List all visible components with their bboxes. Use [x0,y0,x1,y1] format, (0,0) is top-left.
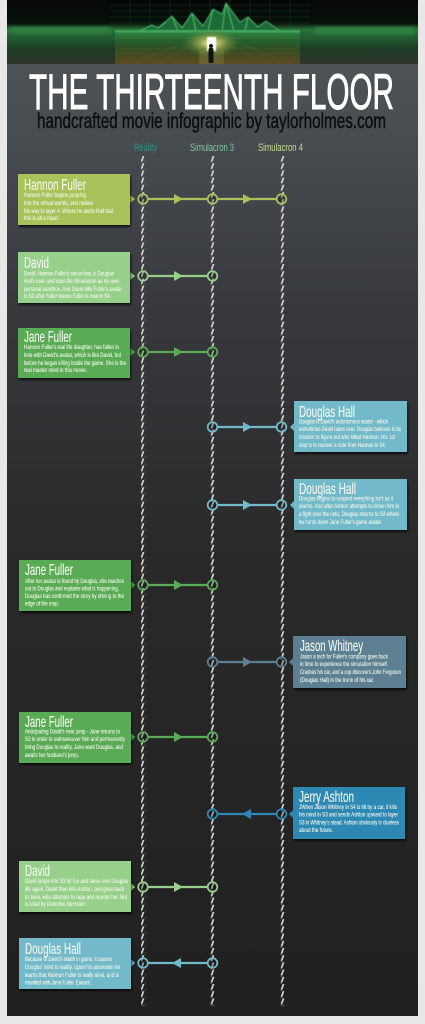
arrow: Douglas Hall Simulacron 3 to Simulacron 4 [208,422,286,432]
card: Jane Fuller [18,328,135,378]
card: Hannon Fuller: into the virtual worlds, and makes [24,200,93,207]
column heading: Simulacron 3: Simulacron 3 [190,142,234,154]
card: Jane Fuller returns: S3 in order to outmaneuver him and permanently [25,736,126,743]
arrow: Jane Fuller Reality to Simulacron 3 [138,347,217,357]
arrow: Jerry Ashton Simulacron 4 to Simulacron 3 [208,809,286,819]
arrow: Douglas Hall Simulacron 3 to Reality [138,958,217,968]
card: Jason Whitney: Jason Whitney [300,638,363,655]
card: David jumps [19,861,135,912]
arrow: Jane Fuller returns [138,732,217,742]
card: Jason Whitney: in time to experience the simulation himself. [300,661,388,668]
card: David jumps: life again. David then kills Ashton, and goes back [25,886,125,893]
card: Hannon Fuller: his way to layer 4. Where he alerts Hall that [24,208,113,215]
card: Jason Whitney: (Douglas Hall) in the trunk of his car. [300,677,374,684]
card: Jane Fuller returns: awaits her husband's jump. [25,752,79,759]
card: David: David [24,255,49,272]
card: Jane Fuller explains: Douglas has confirmed the story by driving to the [25,593,124,600]
arrow: Jason Whitney [208,657,286,667]
card: Douglas Hall ending [19,938,135,989]
card: Hannon Fuller: this is all a fraud. [24,215,59,222]
card: Jane Fuller explains: Jane Fuller [25,562,73,579]
card: Jane Fuller explains: edge of the map. [25,600,59,608]
card: David: in S3 after Fuller leaves Fuller is now in S4. [24,293,111,300]
card: Jane Fuller explains [19,560,135,611]
column heading: Reality: Reality [134,142,157,154]
arrow: David jumps [138,882,217,892]
card: Jerry Ashton: Jerry Ashton [299,789,354,806]
card: Jane Fuller: Hannon Fuller's real life daughter, has fallen in [24,344,119,351]
card: Douglas Hall ending: Because of David's death in game, it causes [25,956,112,963]
card: David: Hall's user, and uses the Simulacron as his own [24,278,119,285]
card: Jane Fuller: Jane Fuller [24,329,72,346]
card: Jerry Ashton: about the future. [299,827,333,834]
arrow: David Reality to Simulacron 3 [138,271,217,281]
arrow: Hannon Fuller Reality to Simulacron 4 [138,194,286,204]
card: Jane Fuller returns [19,712,135,763]
card: Jane Fuller returns: Anticipating David's next jump - Jane returns to [25,728,120,736]
card: Jerry Ashton [289,787,405,839]
card: Jane Fuller explains: After her avatar is found by Douglas, she reaches [25,578,124,585]
column heading: Simulacron 4: Simulacron 4 [258,142,303,154]
timeline: Reality dashed line [141,156,146,1006]
card: Douglas Hall ending: Douglas' mind to reality. Upon his ascension he [25,964,120,971]
card: Douglas Hall autonomous avatar [290,401,407,452]
card: David: David, Hannon Fuller's son-in-law, is Douglas [24,270,114,278]
card: David: personal sandbox. And David kills Fuller's avatar [24,286,123,293]
card: David [18,252,135,303]
card: Douglas Hall suspects: he hunts down Jane Fuller's game avatar. [299,519,382,526]
card: Douglas Hall autonomous avatar: step is to recover a note from Hannon in S4. [299,442,386,449]
card: Jane Fuller explains: out to Douglas and explains what is happening. [25,586,119,592]
card: Douglas Hall ending: reunited with Jane Fuller. Exeunt. [25,980,91,986]
card: David jumps: David [25,863,50,880]
card: Douglas Hall ending: learns that Hannon Fuller is really alive, and is [25,972,119,979]
card: Hannon Fuller: Hannon Fuller begins jumping [24,192,86,199]
card: Jane Fuller: before he began killing inside the game. She is the [24,360,126,367]
card: Hannon Fuller [18,174,135,225]
card: Douglas Hall suspects [290,479,407,530]
card: David jumps: to Jane, who attempts to rape and murder her. But [25,894,127,901]
card: Jane Fuller returns: Jane Fuller [25,714,73,731]
timeline: Simulacron 4 dashed line [280,156,285,1006]
card: David jumps: is killed by Detective Bernstein. [25,901,87,908]
arrow: Jane Fuller explains [138,580,217,590]
card: Douglas Hall suspects: Douglas Hall [299,481,356,498]
card: Jane Fuller: love with David's avatar, which is like David, but [24,352,121,359]
card: Hannon Fuller: Hannon Fuller [24,177,86,194]
card: David jumps: David jumps into S3 for fun and takes over Douglas [25,878,128,885]
card: Jane Fuller returns: bring Douglas to reality. Jane want Douglas, and [25,744,123,751]
card: Douglas Hall autonomous avatar: Douglas Hall [299,404,355,421]
card: Jane Fuller: real master mind in this movie. [24,367,87,374]
card: Jason Whitney [289,636,406,688]
card: Douglas Hall ending: Douglas Hall [25,941,81,958]
arrow: Douglas Hall second trip [208,500,286,510]
timeline: Simulacron 3 dashed line [210,156,215,1006]
banner: glowing green grid landscape with figure [7,0,418,64]
card: Jason Whitney: Jason a tech for Fuller's company goes back [300,654,389,660]
